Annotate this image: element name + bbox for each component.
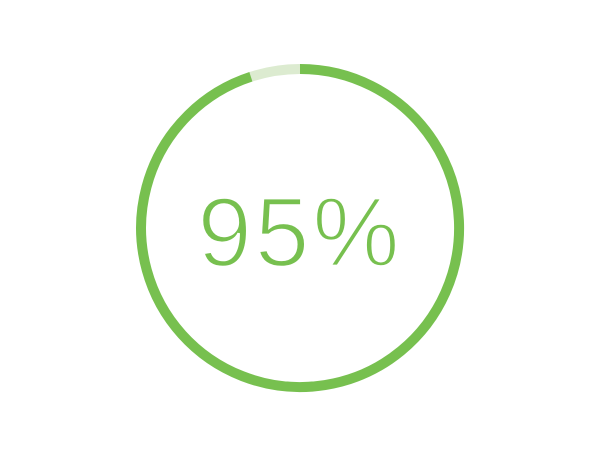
percentage label: 95% bbox=[197, 177, 403, 287]
progress arc 95% bbox=[141, 69, 459, 387]
progress track remainder (light) bbox=[251, 69, 300, 77]
